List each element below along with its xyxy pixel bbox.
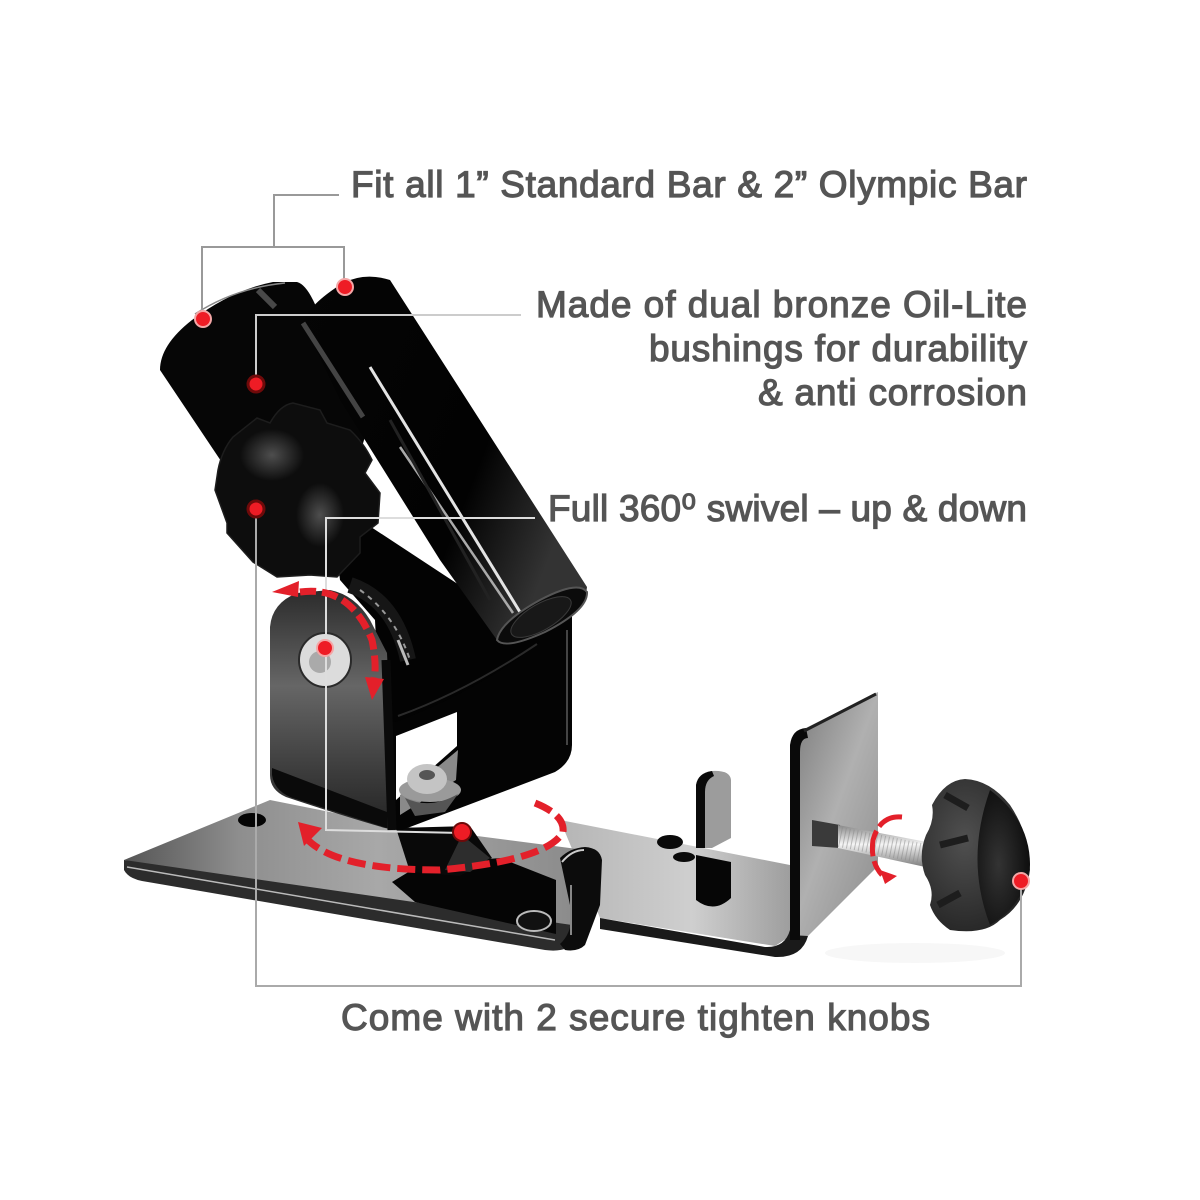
dot: rear tube end (195, 311, 211, 327)
arrow: screw rotation (872, 817, 902, 884)
U bracket with window and bolt (392, 612, 572, 830)
line: bushings (256, 315, 521, 384)
red marker dots (195, 279, 1029, 889)
bolt head (299, 633, 351, 687)
swivel arm detail (350, 585, 410, 665)
product: T-bar landmine attachment (124, 277, 1030, 963)
front tube (303, 277, 587, 645)
arrow: horizontal swivel (298, 803, 563, 870)
dot: front tube end (337, 279, 353, 295)
line: knobs (256, 510, 1021, 986)
swivel base (396, 826, 492, 876)
arrow: vertical swivel (272, 581, 384, 700)
tab reflection (696, 855, 731, 907)
dot: base swivel (453, 823, 471, 841)
text: knobs: Come with 2 secure tighten knobs (341, 997, 930, 1038)
upper knob (215, 403, 380, 577)
text: bushings: bushings for durability (649, 328, 1028, 369)
dot: swivel bolt (317, 640, 333, 656)
red swivel arrows (272, 581, 902, 884)
second clamp plate and U bracket (560, 692, 878, 957)
right knob and threaded screw (812, 779, 1030, 931)
dot: right knob (1013, 873, 1029, 889)
swivel front plate with bolt (270, 590, 395, 830)
text: bushings (536, 284, 1028, 413)
dot: bushing (248, 376, 264, 392)
plate end tab (560, 847, 602, 950)
line: bar fit (202, 195, 344, 318)
slot tab (696, 771, 731, 848)
heading: bar fit: Fit all 1” Standard Bar & 2” Olympic Bar (351, 164, 1027, 205)
text: swivel: Full 360⁰ swivel – up & down (548, 488, 1027, 529)
line: swivel (326, 518, 535, 833)
main base plate (124, 800, 602, 951)
text: bushings: & anti corrosion (758, 372, 1027, 413)
text: bushings: Made of dual bronze Oil-Lite (536, 284, 1027, 325)
ground shadow (825, 943, 1005, 963)
tube opening (497, 588, 587, 644)
leader lines (202, 195, 1021, 986)
dot: upper knob (248, 501, 264, 517)
rear tube (160, 282, 370, 520)
lower tube housing (330, 500, 540, 722)
